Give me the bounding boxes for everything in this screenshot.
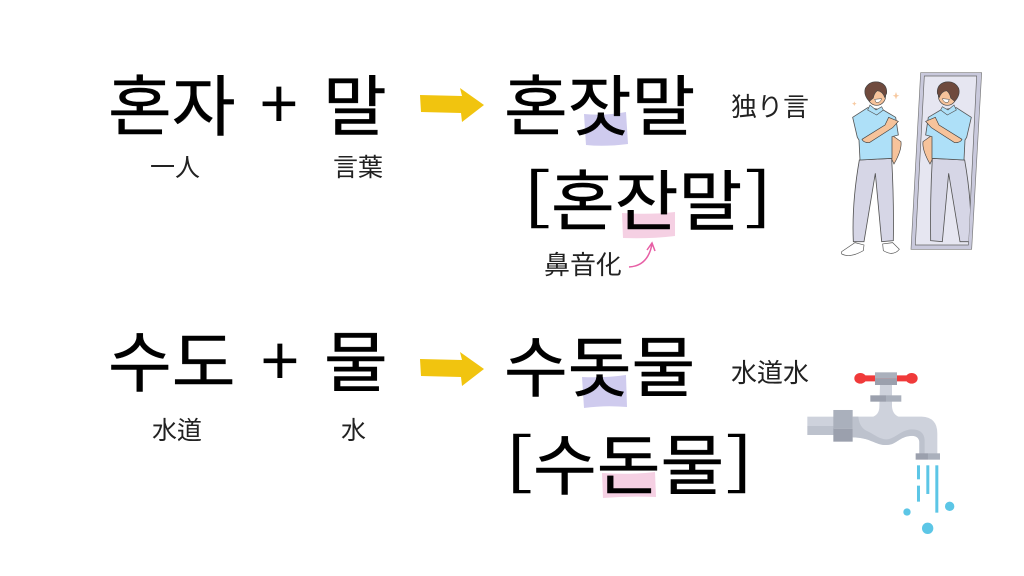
gloss: 水: 水 [341, 417, 366, 445]
gloss: 一人: 一人 [150, 154, 200, 182]
hub [875, 372, 897, 379]
mirror glass [915, 76, 977, 245]
title: 수도 + 물 formula [108, 307, 388, 406]
word: 말: 말 [323, 55, 387, 150]
stem [872, 385, 900, 417]
word: 수돗물: 수돗물 [504, 316, 695, 411]
pronunciation: [혼잔말]: ] [744, 150, 773, 240]
man [842, 82, 901, 256]
gloss: 水道: 水道 [152, 417, 202, 445]
water [903, 465, 954, 534]
gloss: 水道水: 水道水 [731, 358, 809, 388]
spout body [853, 417, 937, 454]
word: 물: 물 [324, 311, 388, 406]
reflection [923, 82, 971, 242]
highlight: lilac top [584, 112, 628, 146]
word: 혼잣말: 혼잣말 [504, 55, 695, 150]
collar [916, 453, 928, 460]
pronunciation: [혼잔말]: [ [522, 150, 551, 240]
illustration: man and mirror [842, 73, 982, 256]
label: 鼻音化: 鼻音化 [544, 250, 622, 280]
highlight: pink top [622, 212, 675, 238]
word: 수도: 수도 [108, 311, 235, 406]
word: 혼자: 혼자 [108, 55, 235, 150]
gloss: 言葉: 言葉 [333, 154, 383, 182]
pipe [807, 417, 834, 426]
pronunciation: [수돈물]: [ [504, 415, 533, 505]
highlight: pink bottom [602, 472, 656, 498]
arrow: pink curved [629, 243, 655, 267]
pronunciation: [수돈물]: ] [725, 415, 754, 505]
plus sign: + [261, 307, 299, 406]
gloss: 独り言: 独り言 [731, 92, 809, 122]
illustration: faucet [807, 372, 954, 534]
handle [860, 369, 912, 387]
plus sign: + [260, 50, 298, 149]
arrow: yellow bottom [420, 352, 484, 386]
highlight: lilac bottom [582, 375, 627, 408]
title: 혼자 + 말 formula [108, 50, 387, 150]
pronunciation: [혼잔말]: 혼잔말 [551, 150, 742, 245]
nut [833, 410, 853, 429]
arrow: yellow top [420, 88, 484, 122]
mirror frame [911, 73, 982, 249]
flange [870, 395, 886, 402]
pronunciation: [수돈물]: 수돈물 [533, 414, 724, 509]
